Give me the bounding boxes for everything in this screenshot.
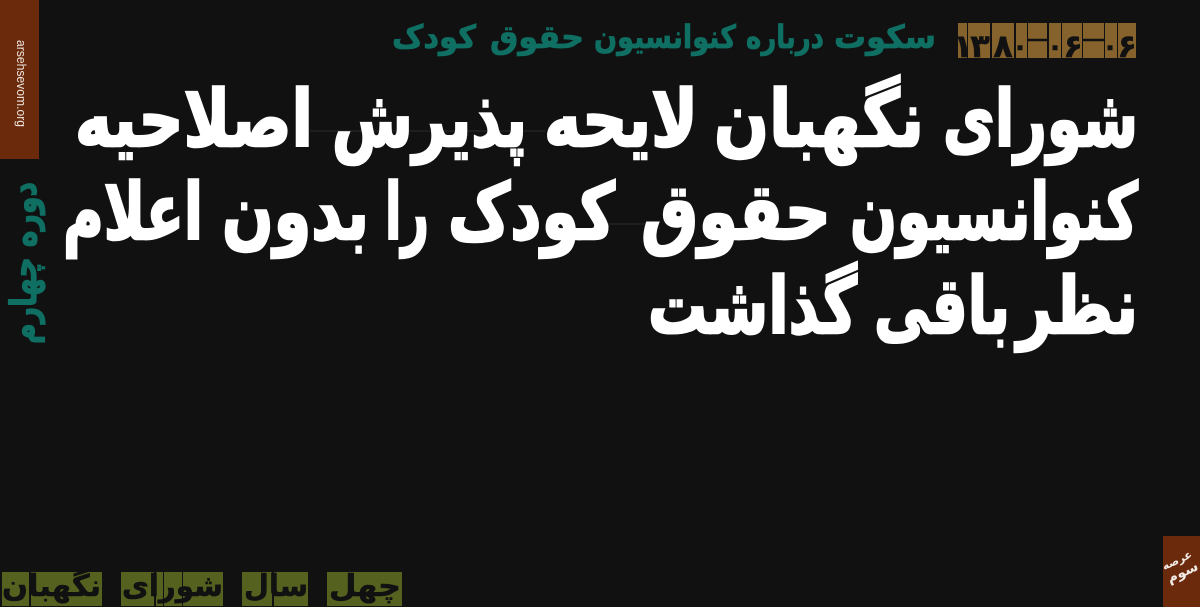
logo block: سوم <box>1164 558 1200 587</box>
logo block <box>1159 536 1200 607</box>
subtitle: کنوانسیون <box>594 18 736 56</box>
subtitle: کودک <box>392 18 476 56</box>
headline: حقوق <box>641 168 831 258</box>
headline: پذیرش <box>332 75 527 165</box>
date stamp: ۳ <box>970 27 990 65</box>
footer series title: چهل <box>329 569 401 604</box>
date stamp: ۰ <box>1102 32 1118 62</box>
date stamp: ۶ <box>1063 27 1083 65</box>
vertical label: period: دوره چهارم <box>4 182 45 344</box>
headline: لایحه <box>544 75 698 165</box>
headline: بدون <box>222 168 369 258</box>
headline <box>63 75 1138 352</box>
headline: نظر <box>1014 262 1138 352</box>
headline: را <box>385 168 429 258</box>
footer series title <box>2 568 402 606</box>
subtitle: سکوت <box>834 18 936 56</box>
date stamp: ۸ <box>993 27 1013 65</box>
sidebar tab: website: arsehsevom.org <box>14 40 28 127</box>
footer series title: نگهبان <box>2 568 101 604</box>
headline: نگهبان <box>714 75 924 165</box>
footer series title: سال <box>244 569 308 604</box>
subtitle: حقوق <box>490 18 584 56</box>
logo block: عرصه <box>1160 548 1194 573</box>
subtitle <box>392 18 936 56</box>
headline: کودک <box>448 168 615 258</box>
date stamp: ۰ <box>1012 32 1028 62</box>
headline: گذاشت <box>648 262 857 352</box>
date stamp: ۶ <box>1117 27 1137 65</box>
headline: اصلاحیه <box>75 75 313 165</box>
footer series title: شورای <box>122 569 223 604</box>
headline: اعلام <box>63 168 203 258</box>
subtitle: درباره <box>746 18 824 56</box>
headline: باقی <box>874 262 1010 352</box>
sidebar tab: website <box>0 0 39 159</box>
date stamp: ۱ <box>953 27 973 65</box>
date stamp <box>953 23 1137 65</box>
date stamp: ۰ <box>1047 32 1063 62</box>
